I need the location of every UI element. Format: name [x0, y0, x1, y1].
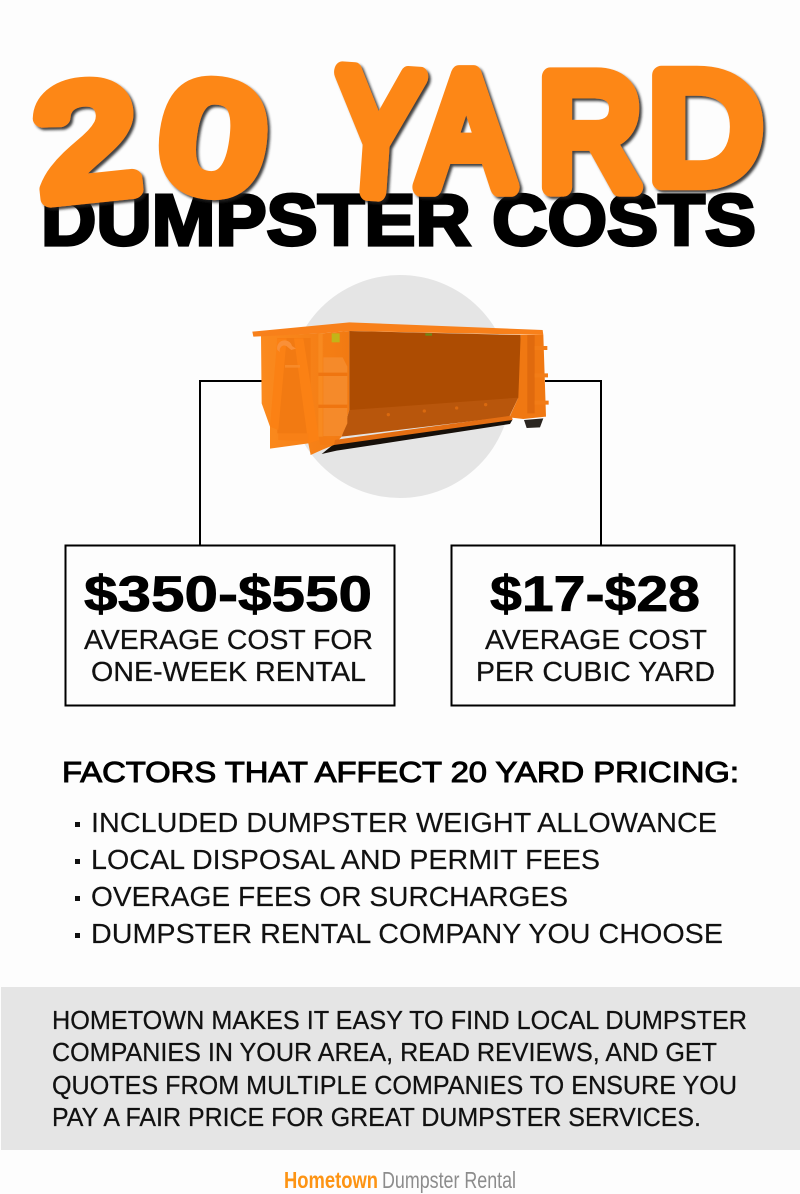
list: pricing factors: INCLUDED DUMPSTER WEIGHT ALLOWANCE [91, 807, 717, 838]
connector line right [545, 381, 601, 545]
icon: orange dumpster [252, 322, 549, 455]
title: 20 yard: D [649, 42, 761, 214]
list: pricing factors: OVERAGE FEES OR SURCHARGES [91, 881, 568, 912]
panel: one-week rental cost [66, 546, 394, 706]
grey circle behind dumpster [288, 275, 512, 498]
list: pricing factors [75, 807, 723, 949]
subtitle: dumpster costs: DUMPSTER COSTS [41, 181, 756, 261]
label: average cost for one-week rental: ONE-WEEK RENTAL [91, 656, 366, 687]
title: 20 yard: 0 [152, 48, 274, 228]
callout text: COMPANIES IN YOUR AREA, READ REVIEWS, AND GET [52, 1037, 717, 1067]
callout text: QUOTES FROM MULTIPLE COMPANIES TO ENSURE YOU [52, 1070, 737, 1100]
heading: factors: FACTORS THAT AFFECT 20 YARD PRICING: [62, 757, 739, 789]
callout text: HOMETOWN MAKES IT EASY TO FIND LOCAL DUMPSTER [52, 1005, 747, 1035]
title: 20 yard: 2 [28, 49, 145, 232]
title: 20 yard: A [420, 40, 512, 222]
panel: cost per cubic yard [452, 546, 734, 706]
list: pricing factors: DUMPSTER RENTAL COMPANY YOU CHOOSE [91, 918, 723, 949]
title: 20 yard [28, 34, 761, 232]
price: 350-550: $350-$550 [84, 566, 372, 622]
logo: hometown dumpster rental: Dumpster Rental [382, 1167, 516, 1193]
label: average cost per cubic yard [476, 624, 715, 687]
callout text: PAY A FAIR PRICE FOR GREAT DUMPSTER SERVICES. [52, 1102, 701, 1132]
connector line left [200, 381, 263, 545]
price: 17-28: $17-$28 [490, 566, 700, 622]
panel: hometown callout [1, 987, 800, 1150]
label: average cost per cubic yard: PER CUBIC YARD [476, 656, 715, 687]
title: 20 yard: Y [328, 34, 426, 230]
label: average cost per cubic yard: AVERAGE COST [485, 624, 707, 655]
label: average cost for one-week rental: AVERAGE COST FOR [84, 624, 373, 655]
logo: hometown dumpster rental [284, 1167, 516, 1193]
callout text [52, 1005, 747, 1132]
list: pricing factors: LOCAL DISPOSAL AND PERMIT FEES [91, 844, 600, 875]
label: average cost for one-week rental [84, 624, 373, 687]
title: 20 yard: R [539, 43, 641, 222]
logo: hometown dumpster rental: Hometown [284, 1167, 378, 1193]
